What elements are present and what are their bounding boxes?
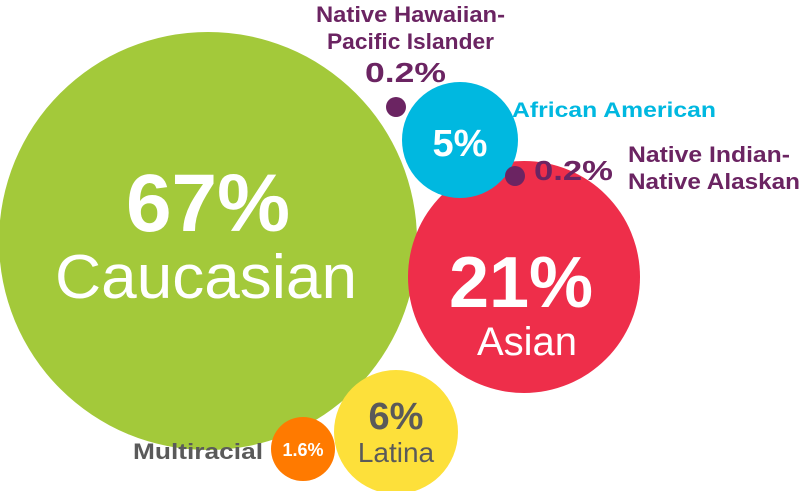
dot: native indian (505, 166, 525, 186)
bubble: multiracial: 1.6% (282, 440, 324, 460)
label: native indian: Native Indian- (628, 142, 790, 167)
label: native hawaiian: Pacific Islander (327, 29, 494, 54)
label: native hawaiian: Native Hawaiian- (316, 2, 505, 27)
bubble: asian: Asian (477, 320, 577, 364)
label: native indian (534, 142, 800, 194)
bubble: caucasian: 67% (126, 158, 290, 249)
label: native hawaiian: 0.2% (365, 57, 446, 88)
bubble: latina (334, 370, 458, 491)
label: african american: African American (512, 99, 716, 122)
bubble: african american (402, 82, 518, 198)
bubble: caucasian: Caucasian (55, 243, 357, 312)
bubble: caucasian (0, 32, 417, 450)
bubble: multiracial (271, 417, 335, 481)
bubble: latina: Latina (358, 437, 435, 468)
bubble: asian: 21% (449, 243, 593, 323)
bubble: asian (408, 161, 640, 393)
label: native indian: 0.2% (534, 155, 613, 186)
bubble: african american: 5% (433, 123, 487, 165)
label: native indian: Native Alaskan (628, 169, 800, 194)
label: multiracial: Multiracial (133, 439, 263, 464)
dot: native hawaiian (386, 97, 406, 117)
label: native hawaiian (316, 2, 505, 88)
bubble: latina: 6% (369, 396, 423, 438)
